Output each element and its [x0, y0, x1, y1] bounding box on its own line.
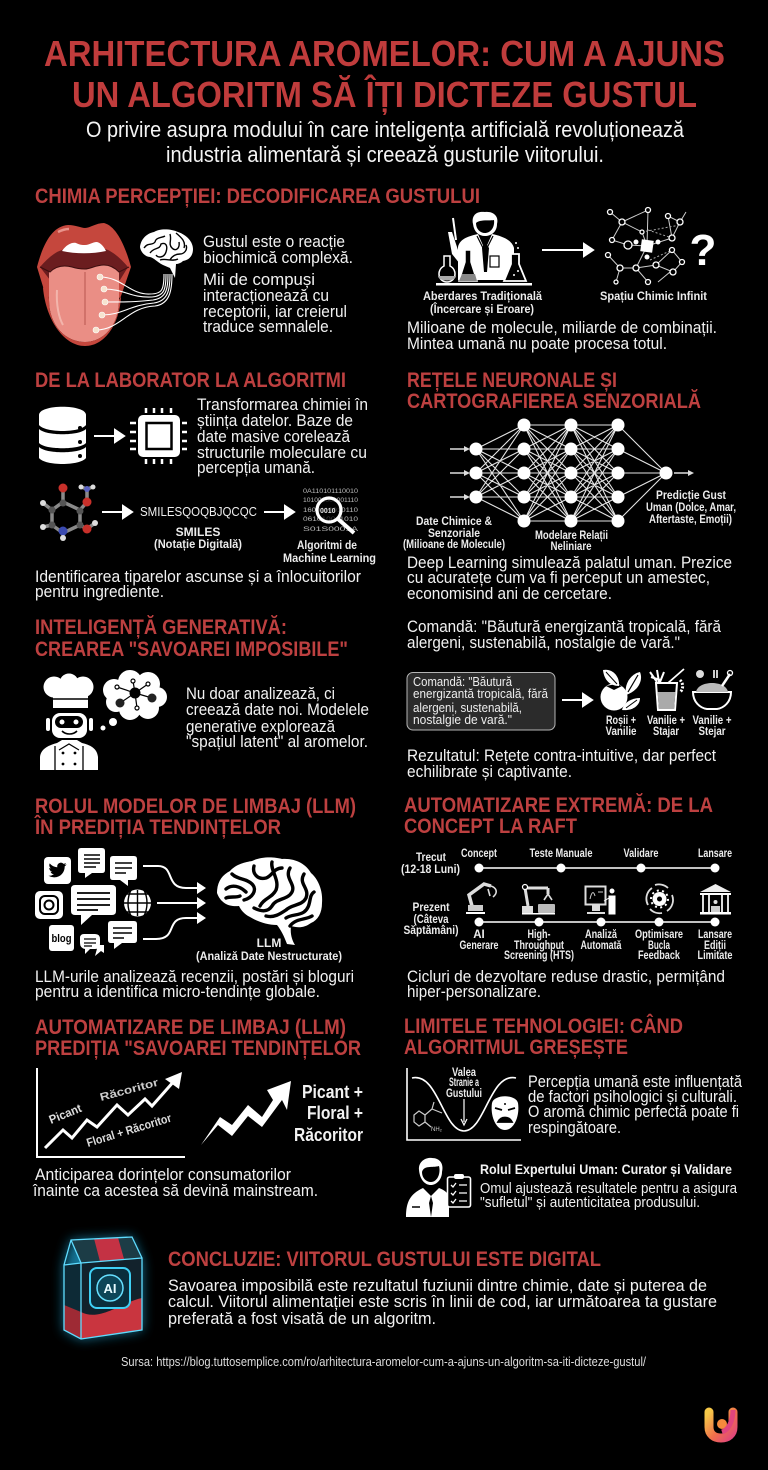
heading: inteligenta generativa: INTELIGENȚĂ GENERATIVĂ: [35, 616, 287, 639]
chart: present timeline: Automată [580, 940, 622, 952]
text: nu doar analizeaza [186, 684, 369, 751]
icon: binary magnifier: 061010011010 [303, 516, 358, 523]
labels: recipes: Vanilie [606, 726, 636, 738]
text: transformarea chimiei: percepția umană. [197, 458, 315, 477]
icon: glowing AI package: AI [104, 1281, 116, 1296]
icon: large brain [217, 857, 322, 945]
labels: llm: (Analiză Date Nestructurate) [196, 949, 342, 963]
icon: social media cluster: blog [52, 933, 72, 945]
callout: prompt box [407, 672, 555, 730]
icon: binary magnifier: S01S0001A [303, 526, 359, 533]
heading: automatizare de limbaj [35, 1016, 361, 1060]
icon: drink glass [650, 669, 684, 710]
text: nu doar analizeaza: creează date noi. Modelele [186, 700, 369, 719]
labels: smiles and ml: Machine Learning [283, 551, 376, 565]
chart: present timeline: Feedback [638, 950, 680, 962]
labels: neural network: Date Chimice & [416, 514, 492, 528]
text: savoarea imposibila: preferată a fost visată de un algoritm. [168, 1309, 436, 1328]
arrow: smiles to matrix [264, 506, 294, 518]
icon: binary magnifier: 1600110010110 [303, 507, 358, 514]
source line: Sursa: https://blog.tuttosemplice.com/ro/arhitectura-aromelor-cum-a-ajuns-un-algoritm-sa-iti-dicteze-gustul/ [121, 1355, 646, 1369]
icon: question mark: ? [690, 226, 716, 275]
heading: inteligenta generativa [35, 616, 348, 661]
text: deep learning: cu acuratețe cum va fi perceput un amestec, [407, 568, 710, 587]
text: milioane de molecule: Mintea umană nu poate procesa totul. [407, 334, 667, 353]
icon: automated analysis [586, 886, 615, 914]
title: UN ALGORITM SĂ ÎȚI DICTEZE GUSTUL [72, 73, 697, 115]
text: anticiparea: Anticiparea dorințelor consumatorilor [35, 1165, 291, 1184]
chart: present timeline: Limitate [698, 950, 732, 962]
chart: uncanny valley: Gustului [446, 1088, 482, 1100]
panel: automatizare extrema [401, 794, 732, 1001]
icon: human expert with clipboard [406, 1158, 470, 1217]
text: perceptia umana: O aromă chimic perfectă poate fi [528, 1102, 739, 1121]
text: rolul expertului: Omul ajustează resultatele pentru a asigura [480, 1181, 738, 1197]
text: anticiparea: înainte ca acestea să devină mainstream. [32, 1181, 318, 1200]
labels: recipes: Stejar [698, 726, 726, 738]
icon: nerve wires [93, 274, 172, 333]
chart: present timeline: Lansare [698, 929, 732, 941]
text: gustul: receptorii, iar creierul [203, 302, 347, 321]
chart: present timeline: Bucla [648, 940, 670, 952]
heading: rolul modelor [34, 795, 356, 839]
labels: flavour combo: Floral + [307, 1103, 363, 1123]
title: ARHITECTURA AROMELOR: CUM A AJUNS [44, 33, 725, 74]
panel: comanda [407, 617, 732, 781]
chart: present timeline: (Câteva [414, 914, 449, 926]
labels: traditional and infinite space: (Încercare și Eroare) [430, 301, 534, 316]
text: perceptia umana: de factori psihologici și culturali. [528, 1087, 737, 1106]
text: gustul: interacționează cu [203, 286, 329, 305]
labels: neural network: Predicție Gust [656, 488, 726, 502]
icon: thought bubble [100, 670, 167, 730]
text: perceptia umana: respingătoare. [528, 1118, 621, 1137]
heading: inteligenta generativa: CREAREA "SAVOAREI IMPOSIBILE" [35, 638, 348, 661]
icon: binary magnifier: 0010 [320, 508, 336, 515]
chart: trend line: Picant [47, 1101, 84, 1127]
chart: past timeline: Concept [461, 848, 497, 860]
labels: smiles and ml: (Notație Digitală) [154, 537, 242, 551]
text: deep learning [407, 553, 732, 603]
chart: trend line [37, 1068, 185, 1157]
labels: smiles and ml: SMILES [176, 525, 220, 539]
heading: concluzie: CONCLUZIE: VIITORUL GUSTULUI ESTE DIGITAL [168, 1248, 601, 1271]
text: comanda: alergeni, sustenabilă, nostalgie de vară." [407, 633, 680, 652]
chart: past timeline: Validare [624, 848, 658, 860]
text: smiles string: SMILESQOQBJQCQC [140, 504, 257, 519]
labels: neural network [403, 488, 736, 553]
labels: neural network: Uman (Dolce, Amar, [646, 500, 736, 514]
text: transformarea chimiei: structurile moleculare cu [197, 443, 367, 462]
panel: chimia perceptiei [35, 185, 717, 353]
heading: rolul modelor: ÎN PREDIȚIA TENDINȚELOR [34, 815, 281, 839]
chart: neural network [450, 418, 694, 528]
callout: prompt box: alergeni, sustenabilă, [413, 700, 522, 715]
text: perceptia umana [528, 1072, 742, 1137]
panel: limitele tehnologiei [404, 1014, 742, 1217]
icon: logo [709, 1410, 733, 1438]
text: comanda: Comandă: "Băutură energizantă tropicală, fără [407, 617, 721, 636]
chart: present timeline: Generare [460, 940, 498, 952]
text: nu doar analizeaza: Nu doar analizează, ci [186, 684, 335, 703]
heading: automatizare de limbaj: PREDIȚIA "SAVOAREI TENDINȚELOR [35, 1037, 361, 1060]
text: identificarea tiparelor [35, 567, 361, 601]
chart: present timeline: Optimisare [635, 929, 683, 941]
panel: automatizare de limbaj [32, 1016, 363, 1200]
labels: flavour combo: Picant + [302, 1082, 363, 1102]
icon: bowl [693, 670, 732, 709]
text: comanda [407, 617, 721, 652]
text: cicluri de dezvoltare: Cicluri de dezvoltare reduse drastic, permițând [407, 967, 725, 986]
icon: robot chef [40, 674, 98, 770]
icon: mouth and tongue [37, 223, 131, 346]
text: rezultatul [407, 746, 716, 781]
heading: retele neuronale: CARTOGRAFIEREA SENZORIALĂ [407, 390, 701, 413]
panel: retele neuronale [403, 369, 736, 603]
subtitle [86, 117, 685, 167]
text: gustul: traduce semnalele. [203, 317, 333, 336]
text: gustul: biochimică complexă. [203, 248, 353, 267]
text: savoarea imposibila [168, 1276, 717, 1328]
panel: de la laborator la algoritmi [35, 369, 376, 601]
callout: prompt box: Comandă: "Băutură [413, 674, 513, 689]
panel: rolul modelor de limbaj [34, 795, 356, 1001]
text: rolul expertului [480, 1161, 738, 1211]
chart: trend line: Răcoritor [99, 1077, 161, 1104]
labels: neural network: Neliniare [550, 541, 592, 553]
heading: retele neuronale [407, 369, 701, 413]
icon: high throughput robot [522, 884, 555, 914]
icon: binary magnifier: 0A110101110010 [303, 488, 358, 495]
text: cicluri de dezvoltare: hiper-personalizare. [407, 982, 541, 1001]
labels: recipes [606, 715, 732, 738]
labels: flavour combo [294, 1082, 363, 1145]
callout: prompt box: nostalgie de vară." [413, 712, 512, 727]
text: deep learning: economisind ani de cercetare. [407, 584, 612, 603]
text: nu doar analizeaza: "spațiul latent" al aromelor. [186, 732, 368, 751]
chart: past timeline [401, 848, 732, 876]
text: cicluri de dezvoltare [407, 967, 725, 1001]
labels: smiles and ml [154, 525, 376, 565]
labels: neural network: Aftertaste, Emoții) [649, 512, 732, 526]
text: identificarea tiparelor: Identificarea tiparelor ascunse și a înlocuitorilor [35, 567, 361, 586]
subtitle: industria alimentară și creează gusturile viitorului. [166, 142, 604, 167]
heading: automatizare de limbaj: AUTOMATIZARE DE LIMBAJ (LLM) [35, 1016, 346, 1039]
arrows: data to brain [143, 866, 206, 939]
chart: uncanny valley: NH₂ [431, 1127, 443, 1133]
heading: limitele tehnologiei: LIMITELE TEHNOLOGIEI: CÂND [404, 1014, 683, 1038]
labels: traditional and infinite space: Aberdares Tradițională [423, 289, 542, 303]
labels: llm [196, 936, 342, 963]
labels: recipes: Stajar [653, 726, 679, 738]
labels: neural network: Senzoriale [428, 528, 480, 540]
chart: present timeline: Throughput [514, 940, 564, 952]
chart: past timeline: Lansare [698, 848, 732, 860]
chart: past timeline: Teste Manuale [530, 848, 592, 860]
chart: uncanny valley: Stranie a [449, 1077, 479, 1089]
text: transformarea chimiei [197, 395, 368, 477]
icon: chip [130, 408, 187, 464]
arrow: scientist to space [542, 244, 593, 256]
heading: automatizare extrema [404, 794, 713, 838]
chart: past timeline: Trecut [416, 852, 446, 864]
chart: present timeline: High- [528, 929, 551, 941]
chart: present timeline: Ediții [704, 940, 726, 952]
chart: present timeline: Screening (HTS) [504, 950, 574, 962]
text: transformarea chimiei: știința datelor. Baze de [197, 411, 353, 430]
heading: chimia perceptiei: CHIMIA PERCEPȚIEI: DECODIFICAREA GUSTULUI [35, 185, 480, 208]
text: identificarea tiparelor: pentru ingrediente. [35, 582, 164, 601]
text: llm-urile: pentru a identifica micro-tendințe globale. [35, 982, 320, 1001]
icon: binary magnifier [303, 488, 359, 533]
icon: disgusted mask [492, 1096, 518, 1130]
icon: social media cluster [35, 848, 151, 956]
text: savoarea imposibila: Savoarea imposibilă este rezultatul fuziunii dintre chimie, date și puterea de [168, 1276, 707, 1295]
heading: rolul modelor: ROLUL MODELOR DE LIMBAJ (LLM) [35, 795, 356, 818]
chart: uncanny valley: Valea [452, 1067, 476, 1079]
heading: automatizare extrema: AUTOMATIZARE EXTREMĂ: DE LA [404, 794, 713, 817]
arrow: rising trend [201, 1081, 291, 1145]
labels: neural network: Modelare Relații [535, 528, 608, 542]
chart: present timeline: Săptămâni) [404, 925, 459, 937]
labels: traditional and infinite space [423, 289, 707, 316]
text: gustul [203, 232, 353, 336]
text: transformarea chimiei: Transformarea chimiei în [197, 395, 368, 414]
heading: automatizare extrema: CONCEPT LA RAFT [404, 815, 577, 838]
text: gustul: Gustul este o reacție [203, 232, 345, 251]
icon: glowing AI package [64, 1237, 142, 1339]
text: milioane de molecule: Milioane de molecule, miliarde de combinații. [407, 318, 717, 337]
text: rolul expertului: Rolul Expertului Uman: Curator și Validare [480, 1161, 732, 1177]
icon: molecule [40, 484, 98, 541]
heading: limitele tehnologiei: ALGORITMUL GREȘEȘTE [404, 1036, 628, 1059]
labels: neural network: (Milioane de Molecule) [403, 537, 505, 551]
text: anticiparea [32, 1165, 318, 1200]
callout: prompt box: energizantă tropicală, fără [413, 686, 549, 701]
chart: present timeline: AI [473, 929, 485, 941]
text: savoarea imposibila: calcul. Viitorul alimentației este scris în linii de cod, iar următoarea ta gustare [168, 1292, 717, 1311]
chart: present timeline: Prezent [412, 902, 450, 914]
icon: binary magnifier: 101001001001110 [303, 497, 358, 504]
labels: recipes: Vanilie + [647, 715, 685, 727]
heading: limitele tehnologiei [404, 1014, 683, 1059]
arrow: prompt to recipes [562, 694, 592, 706]
icon: robot arm [466, 884, 496, 914]
icon: small brain [140, 229, 193, 278]
icon: scientist [436, 212, 532, 286]
text: rezultatul: Rezultatul: Rețete contra-intuitive, dar perfect [407, 746, 716, 765]
panel: inteligenta generativa [35, 616, 369, 770]
chart: past timeline: (12-18 Luni) [401, 862, 460, 876]
labels: traditional and infinite space: Spațiu Chimic Infinit [600, 289, 707, 303]
text: gustul: Mii de compuși [203, 270, 315, 289]
heading: retele neuronale: REȚELE NEURONALE ȘI [407, 369, 617, 392]
chart: trend line: Floral + Răcoritor [85, 1111, 173, 1150]
text: deep learning: Deep Learning simulează palatul uman. Prezice [407, 553, 732, 572]
labels: recipes: Vanilie + [692, 715, 732, 727]
title [44, 33, 725, 115]
icon: feedback gear [646, 884, 673, 913]
labels: recipes: Roșii + [606, 715, 636, 727]
text: rezultatul: echilibrate și captivante. [407, 762, 572, 781]
panel: concluzie [64, 1237, 717, 1339]
arrow: database to chip [94, 430, 124, 442]
text: nu doar analizeaza: generative explorează [186, 717, 335, 736]
text: llm-urile [35, 967, 354, 1001]
icon: museum shelf [700, 884, 731, 914]
icon: tomato and leaves [600, 670, 641, 710]
chart: present timeline: Analiză [585, 929, 617, 941]
arrow: molecule to smiles [102, 506, 132, 518]
text: milioane de molecule [407, 318, 717, 353]
labels: flavour combo: Răcoritor [294, 1125, 363, 1145]
text: rolul expertului: "sufletul" și autenticitatea produsului. [480, 1195, 700, 1211]
text: llm-urile: LLM-urile analizează recenzii, postări și bloguri [35, 967, 354, 986]
subtitle: O privire asupra modului în care inteligența artificială revoluționează [86, 117, 685, 142]
labels: smiles and ml: Algoritmi de [297, 538, 357, 552]
heading: de la laborator: DE LA LABORATOR LA ALGORITMI [35, 369, 346, 392]
text: transformarea chimiei: date masive corelează [197, 427, 350, 446]
chart: present timeline [404, 902, 732, 962]
icon: chemical network [606, 208, 686, 284]
labels: llm: LLM [257, 936, 281, 950]
chart: uncanny valley [407, 1067, 521, 1140]
icon: database [39, 407, 86, 464]
